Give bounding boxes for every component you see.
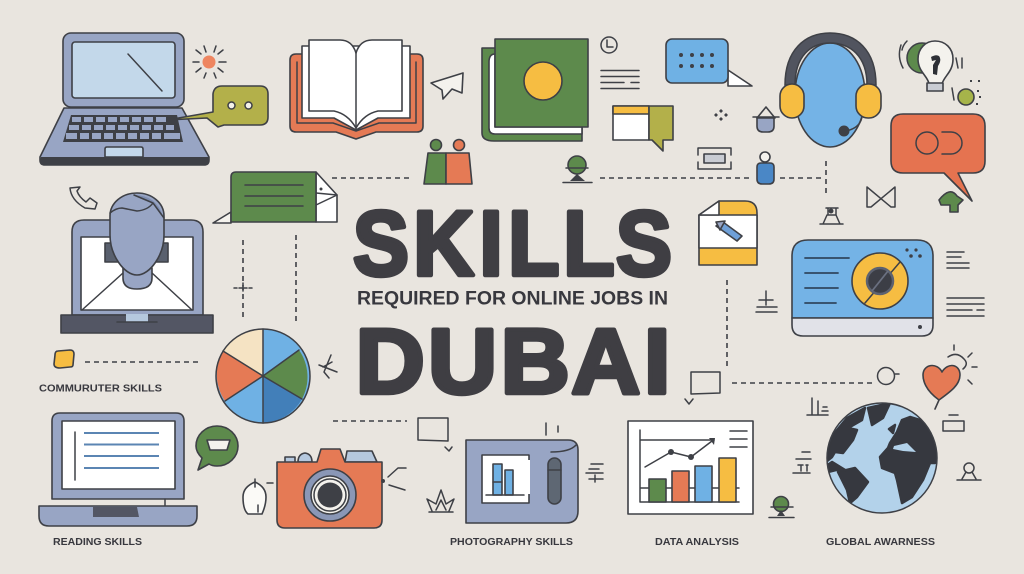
small icons right bbox=[943, 415, 981, 480]
bar: blue bbox=[695, 466, 712, 502]
small marker: star bbox=[319, 355, 337, 378]
bar: green bbox=[649, 479, 666, 502]
label: data analysis: DATA ANALYSIS bbox=[655, 536, 739, 548]
chart card: data analysis bbox=[628, 421, 753, 514]
icon: headset head bbox=[780, 33, 881, 147]
icon: open book bbox=[290, 40, 423, 139]
icon: window with olive note bbox=[613, 106, 673, 151]
subtitle: REQUIRED FOR ONLINE JOBS IN bbox=[357, 288, 668, 310]
icon: sun bbox=[193, 46, 226, 78]
text line decorations right bbox=[756, 252, 984, 316]
bar: orange bbox=[672, 471, 689, 502]
title: SKILLS: SKILLS bbox=[353, 191, 672, 295]
icon: green chat with envelope bbox=[213, 172, 337, 223]
icon: blue display with disc bbox=[792, 240, 933, 336]
icon: phone bbox=[70, 187, 97, 209]
icon: light bulb bbox=[899, 41, 981, 105]
small icons around camera bbox=[243, 468, 406, 514]
icon: olive speech bubble bbox=[167, 86, 268, 127]
placeholder rectangles bbox=[418, 368, 899, 451]
label: photography skills: PHOTOGRAPHY SKILLS bbox=[450, 536, 573, 548]
icon: green book bbox=[482, 39, 588, 141]
small marker: cross bbox=[234, 283, 253, 293]
icon: blue speech bubble bbox=[666, 39, 752, 86]
bar: yellow bbox=[719, 458, 736, 502]
icon: green speech bubble bbox=[196, 426, 238, 470]
label: reading skills: READING SKILLS bbox=[53, 536, 142, 548]
icon: yellow tag bbox=[54, 350, 74, 368]
label: global awareness: GLOBAL AWARNESS bbox=[826, 536, 935, 548]
trend line bbox=[645, 438, 715, 467]
icon: camera bbox=[277, 449, 382, 528]
icon: document with pencil bbox=[699, 201, 757, 265]
icon: people pair bbox=[424, 140, 472, 184]
icon: paper plane bbox=[431, 73, 463, 99]
small icons: top centre bbox=[698, 107, 779, 169]
icon: heart with rays bbox=[923, 345, 977, 409]
icon: reading laptop bbox=[39, 413, 197, 526]
icon: laptop with chat bubble bbox=[40, 33, 268, 165]
pie chart bbox=[216, 329, 310, 423]
small icons near globe bbox=[769, 398, 828, 518]
small icon: flame bbox=[427, 490, 454, 512]
title: DUBAI: DUBAI bbox=[356, 310, 670, 413]
label: communication skills: COMMURUTER SKILLS bbox=[39, 382, 162, 394]
icon: person in envelope monitor bbox=[61, 193, 213, 333]
icon: globe bbox=[826, 403, 937, 513]
small icons: x shape and alarm bbox=[820, 187, 895, 224]
icon: blue person bbox=[757, 152, 774, 184]
icon: clock and text lines bbox=[601, 37, 639, 88]
icon: photography device bbox=[466, 423, 603, 523]
connector lines bbox=[85, 161, 872, 421]
icon: green person marker bbox=[563, 156, 592, 182]
icon: orange speech bubble bbox=[891, 114, 985, 212]
